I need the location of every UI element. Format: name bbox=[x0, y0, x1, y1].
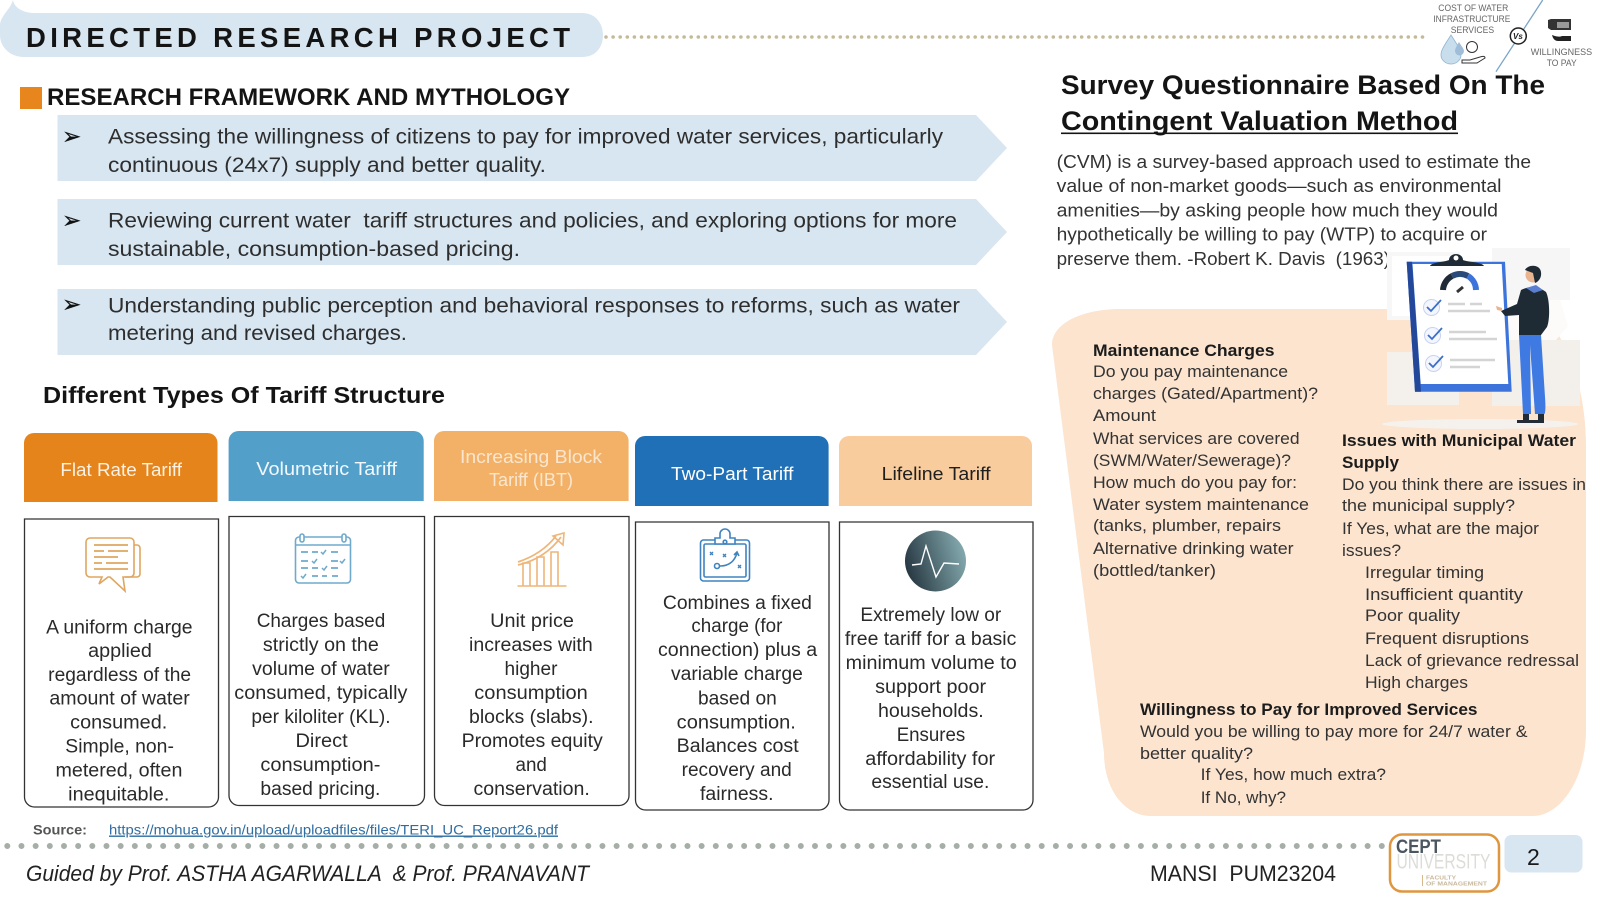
questions: municipal supply issues: Insufficient quantity bbox=[1365, 585, 1524, 604]
icon: growth chart bbox=[518, 533, 566, 586]
person bbox=[1496, 266, 1549, 423]
body text: based on bbox=[698, 688, 777, 710]
icon group: cost vs willingness: COST OF WATER bbox=[1438, 3, 1509, 13]
questions: municipal supply issues: the municipal supply? bbox=[1342, 496, 1515, 515]
text block: CVM definition: amenities—by asking people how much they would bbox=[1057, 200, 1498, 220]
questions: willingness to pay bbox=[1140, 700, 1528, 807]
text block: CVM definition: value of non-market goods—such as environmental bbox=[1057, 175, 1502, 196]
questions: maintenance charges: (bottled/tanker) bbox=[1093, 561, 1216, 580]
banner 1: ➢ bbox=[62, 124, 81, 150]
banner 1: continuous (24x7) supply and better quality. bbox=[108, 154, 546, 177]
body text bbox=[46, 618, 193, 806]
body text: higher bbox=[504, 659, 558, 680]
section heading: research framework: RESEARCH FRAMEWORK AND MYTHOLOGY bbox=[47, 84, 570, 111]
body text: affordability for bbox=[865, 749, 996, 770]
banner 3: metering and revised charges. bbox=[108, 322, 407, 345]
source citation: Source: bbox=[33, 822, 87, 838]
icon group: cost vs willingness: SERVICES bbox=[1451, 25, 1494, 35]
banner 2: sustainable, consumption-based pricing. bbox=[108, 238, 520, 261]
questions: willingness to pay: better quality? bbox=[1140, 744, 1253, 763]
gauge bbox=[1443, 274, 1476, 290]
panel: two-part tariff bbox=[635, 436, 829, 810]
body text: support poor bbox=[875, 677, 987, 698]
panel: volumetric tariff bbox=[229, 431, 424, 806]
checklist bbox=[1424, 300, 1497, 372]
icon group: cost vs willingness: INFRASTRUCTURE bbox=[1433, 14, 1510, 24]
text block: CVM definition: (CVM) is a survey-based approach used to estimate the bbox=[1057, 151, 1531, 172]
heading: tariff structure: Different Types Of Tariff Structure bbox=[43, 382, 445, 408]
banner 2 bbox=[58, 199, 1007, 265]
questions: maintenance charges: Alternative drinking water bbox=[1093, 539, 1294, 558]
title: DIRECTED RESEARCH PROJECT bbox=[26, 22, 570, 53]
body text: blocks (slabs). bbox=[469, 707, 594, 728]
body text: Balances cost bbox=[677, 736, 799, 757]
body text: consumption bbox=[474, 683, 588, 704]
icon: pulse bbox=[905, 530, 966, 592]
questions: maintenance charges: Water system maintenance bbox=[1093, 495, 1309, 514]
icon group: cost vs willingness: WILLINGNESS bbox=[1531, 47, 1592, 57]
body text: Ensures bbox=[897, 725, 965, 746]
body text: consumed. bbox=[70, 712, 167, 734]
header: flat rate: Flat Rate Tariff bbox=[60, 459, 183, 480]
questions: municipal supply issues: Supply bbox=[1342, 453, 1400, 472]
panel: flat rate tariff bbox=[24, 433, 218, 807]
panel: research objectives bbox=[58, 115, 1007, 355]
panel: survey questions bbox=[1052, 248, 1586, 816]
text block: CVM definition bbox=[1057, 151, 1531, 269]
body text bbox=[658, 593, 818, 805]
heading: survey questionnaire bbox=[1061, 70, 1545, 136]
heading: survey questionnaire: Contingent Valuation Method bbox=[1061, 106, 1458, 136]
header: two-part bbox=[635, 436, 829, 506]
questions: willingness to pay: Willingness to Pay for Improved Services bbox=[1140, 700, 1478, 719]
body text: Direct bbox=[296, 731, 348, 752]
header: lifeline bbox=[839, 436, 1032, 506]
icon group: cost vs willingness: TO PAY bbox=[1547, 58, 1577, 68]
icon: speech bubble bbox=[86, 538, 140, 591]
body text: Simple, non- bbox=[65, 736, 174, 758]
source citation: https://mohua.gov.in/upload/uploadfiles/files/TERI_UC_Report26.pdf bbox=[109, 822, 558, 838]
panel: increasing block tariff bbox=[434, 431, 629, 806]
header banner bbox=[0, 0, 603, 57]
logo: CEPT University: CEPT bbox=[1396, 837, 1441, 858]
logo: CEPT University bbox=[1390, 834, 1499, 892]
body text: per kiloliter (KL). bbox=[251, 707, 391, 728]
body text: Charges based bbox=[257, 611, 385, 632]
body text: consumption- bbox=[260, 755, 380, 776]
questions: maintenance charges: (tanks, plumber, repairs bbox=[1093, 516, 1281, 535]
body text bbox=[845, 605, 1017, 793]
questions: maintenance charges: Amount bbox=[1093, 406, 1156, 425]
body text: consumption. bbox=[677, 712, 796, 734]
questions: municipal supply issues: If Yes, what are the major bbox=[1342, 519, 1539, 538]
header: increasing block: Increasing Block bbox=[460, 446, 603, 467]
questions: maintenance charges: Do you pay maintenance bbox=[1093, 362, 1288, 381]
footer: guides: Guided by Prof. ASTHA AGARWALLA & Prof. PRANAVANT bbox=[26, 861, 590, 886]
footer: author: MANSI PUM23204 bbox=[1150, 861, 1336, 886]
heading: survey questionnaire: Survey Questionnaire Based On The bbox=[1061, 70, 1545, 100]
questions: municipal supply issues: Poor quality bbox=[1365, 606, 1461, 625]
body text: essential use. bbox=[871, 772, 989, 793]
questions: willingness to pay: Would you be willing to pay more for 24/7 water & bbox=[1140, 722, 1528, 741]
body text: free tariff for a basic bbox=[845, 629, 1016, 650]
text block: CVM definition: preserve them. -Robert K. Davis (1963) bbox=[1057, 248, 1390, 269]
body text: Promotes equity bbox=[462, 731, 603, 752]
questions: municipal supply issues: High charges bbox=[1365, 673, 1468, 692]
questions: municipal supply issues: Do you think there are issues in bbox=[1342, 475, 1586, 494]
illustration: person with checklist bbox=[1382, 248, 1580, 429]
questions: municipal supply issues bbox=[1342, 431, 1586, 692]
body text: households. bbox=[878, 701, 984, 722]
header: lifeline: Lifeline Tariff bbox=[882, 463, 992, 484]
questions: maintenance charges: How much do you pay for: bbox=[1093, 473, 1297, 492]
body text: regardless of the bbox=[48, 665, 191, 686]
body text: and bbox=[516, 755, 547, 776]
body text: variable charge bbox=[671, 664, 803, 685]
banner 3: ➢ bbox=[62, 292, 81, 318]
body text: based pricing. bbox=[260, 779, 380, 800]
body text: Unit price bbox=[490, 611, 574, 632]
icon: calendar bbox=[296, 534, 350, 583]
header: volumetric bbox=[229, 431, 424, 501]
banner 3: Understanding public perception and behavioral responses to reforms, such as water bbox=[108, 294, 960, 318]
body text: connection) plus a bbox=[658, 640, 818, 661]
body text: Extremely low or bbox=[860, 605, 1002, 626]
text block: CVM definition: hypothetically be willing to pay (WTP) to acquire or bbox=[1057, 224, 1487, 244]
panel: lifeline tariff bbox=[839, 436, 1033, 810]
body text: Combines a fixed bbox=[663, 593, 812, 614]
body text bbox=[462, 611, 603, 800]
logo: CEPT University: FACULTY bbox=[1426, 876, 1456, 882]
questions: maintenance charges: charges (Gated/Apartment)? bbox=[1093, 384, 1318, 403]
questions: maintenance charges bbox=[1093, 341, 1318, 580]
questions: municipal supply issues: Irregular timing bbox=[1365, 563, 1484, 582]
logo: CEPT University: OF MANAGEMENT bbox=[1426, 882, 1488, 888]
body text: conservation. bbox=[474, 779, 590, 800]
questions: maintenance charges: What services are covered bbox=[1093, 429, 1300, 448]
banner 3 bbox=[58, 289, 1007, 355]
banner 2: Reviewing current water tariff structures and policies, and exploring options for more bbox=[108, 210, 957, 232]
questions: willingness to pay: If No, why? bbox=[1201, 788, 1286, 807]
body text: recovery and bbox=[682, 760, 792, 781]
body text: minimum volume to bbox=[846, 653, 1017, 674]
questions: municipal supply issues: issues? bbox=[1342, 541, 1401, 560]
body text: fairness. bbox=[700, 784, 774, 805]
body text: inequitable. bbox=[68, 784, 169, 806]
body text: applied bbox=[88, 641, 152, 662]
header: two-part: Two-Part Tariff bbox=[671, 463, 794, 484]
page number: 2 bbox=[1527, 844, 1540, 870]
questions: municipal supply issues: Lack of grievance redressal bbox=[1365, 651, 1579, 670]
questions: willingness to pay: If Yes, how much extra? bbox=[1201, 765, 1386, 784]
body text: A uniform charge bbox=[46, 618, 193, 638]
body text: volume of water bbox=[252, 659, 390, 680]
page number bbox=[1504, 835, 1582, 872]
body text: increases with bbox=[469, 635, 593, 656]
banner 1 bbox=[58, 115, 1007, 181]
body text bbox=[234, 611, 408, 800]
body text: charge (for bbox=[691, 616, 783, 637]
questions: municipal supply issues: Issues with Municipal Water bbox=[1342, 431, 1576, 450]
icon group: cost vs willingness bbox=[1433, 0, 1592, 72]
questions: maintenance charges: (SWM/Water/Sewerage)? bbox=[1093, 451, 1291, 470]
header: increasing block bbox=[434, 431, 629, 501]
icon group: cost vs willingness: Vs bbox=[1513, 32, 1523, 41]
body text: consumed, typically bbox=[234, 683, 408, 704]
questions: municipal supply issues: Frequent disruptions bbox=[1365, 629, 1529, 648]
logo: CEPT University: UNIVERSITY bbox=[1396, 850, 1490, 874]
banner 1: Assessing the willingness of citizens to pay for improved water services, particularly bbox=[108, 126, 944, 148]
header: increasing block: Tariff (IBT) bbox=[489, 469, 573, 490]
header: volumetric: Volumetric Tariff bbox=[256, 458, 398, 479]
header: flat rate bbox=[24, 433, 218, 502]
icon: clipboard plan bbox=[700, 529, 750, 581]
body text: strictly on the bbox=[263, 635, 379, 656]
questions: maintenance charges: Maintenance Charges bbox=[1093, 341, 1274, 360]
banner 2: ➢ bbox=[62, 208, 81, 234]
body text: amount of water bbox=[49, 688, 190, 710]
body text: metered, often bbox=[56, 760, 182, 782]
